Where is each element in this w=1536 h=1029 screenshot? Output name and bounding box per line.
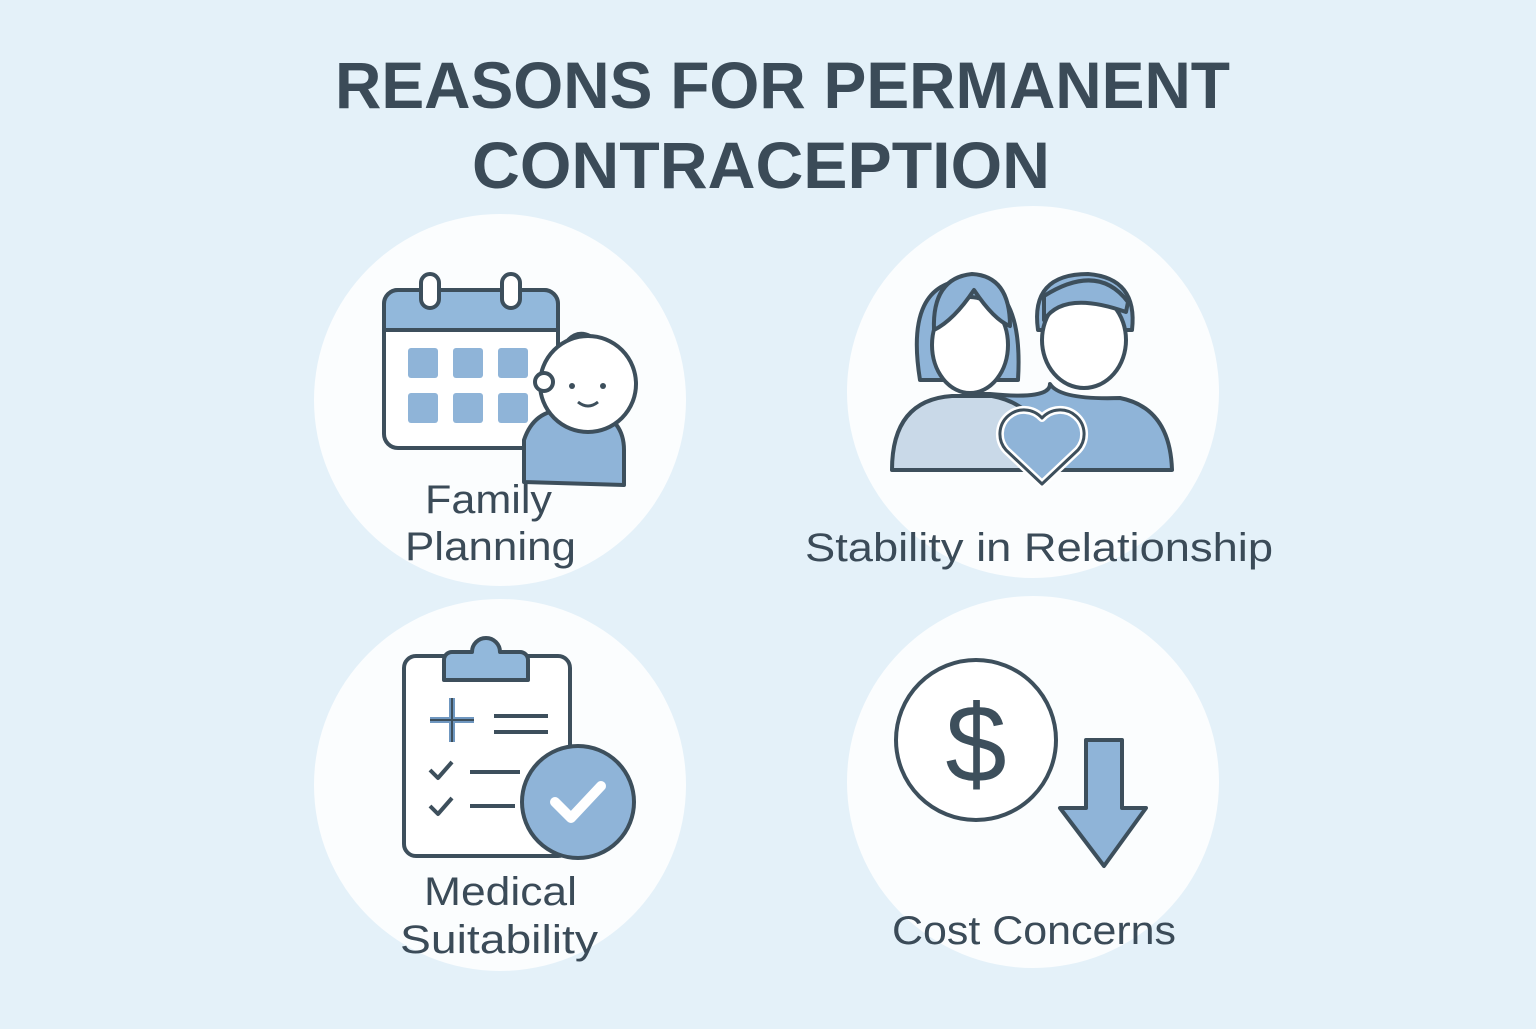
- label: Stability in Relationship: [805, 526, 1273, 570]
- label: [400, 870, 598, 962]
- icon: dollar coin: $: [945, 683, 1007, 806]
- icon: couple: [892, 274, 1172, 484]
- label: Suitability: [400, 918, 598, 962]
- label: Planning: [405, 525, 576, 569]
- panel: medical suitability: [314, 599, 686, 971]
- label: Family: [425, 478, 552, 522]
- panel: family planning: [314, 214, 686, 586]
- panel: cost concerns: [847, 596, 1219, 968]
- icon: baby: [524, 334, 636, 485]
- icon: dollar coin: [896, 660, 1056, 820]
- icon: clipboard: [404, 638, 634, 858]
- label: Cost Concerns: [892, 909, 1176, 953]
- title: REASONS FOR PERMANENT: [335, 48, 1230, 122]
- title: [335, 48, 1230, 202]
- label: Medical: [424, 870, 577, 914]
- icon: calendar: [384, 274, 558, 448]
- icon: down arrow: [1060, 740, 1146, 866]
- title: CONTRACEPTION: [472, 128, 1050, 202]
- label: [405, 478, 576, 569]
- panel: relationship: [805, 206, 1273, 578]
